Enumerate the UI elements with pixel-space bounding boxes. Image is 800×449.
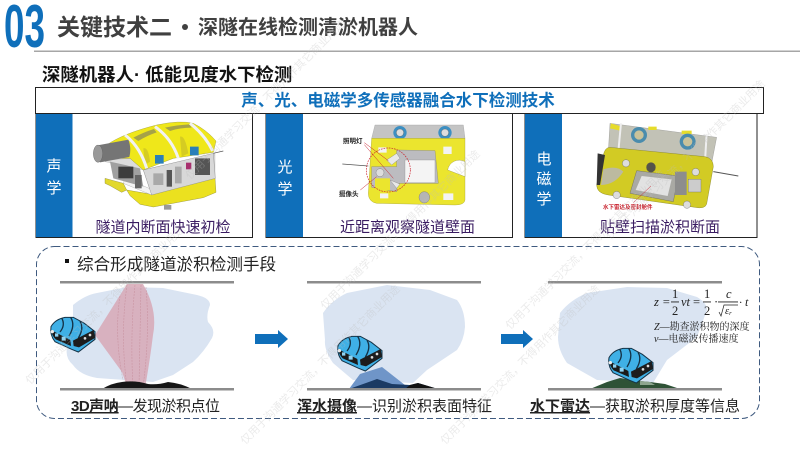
title [57, 14, 418, 40]
formula: · t [739, 295, 749, 309]
side label: optics [266, 114, 303, 237]
formula: 2 [672, 304, 678, 318]
scene: 3D sonar [51, 281, 234, 415]
title: 深隧在线检测清淤机器人 [198, 15, 418, 39]
subtitle: 深隧机器人· 低能见度水下检测 [42, 64, 292, 85]
image: yellow robot front view [93, 122, 223, 210]
text: 仅用于沟通学习交流，不得用作其它商业用途 [317, 147, 483, 312]
caption: 贴壁扫描淤积断面 [600, 219, 720, 236]
formula legend: v—电磁波传播速度 [654, 332, 738, 345]
icon: blue robot [609, 348, 653, 383]
banner: multi-sensor technology [36, 88, 764, 114]
label: radar and sealed parts: 水下雷达及密封舱件 [603, 203, 653, 211]
side label: acoustics: 学 [46, 180, 62, 197]
side label: acoustics [36, 114, 72, 237]
panel: acoustics [36, 114, 252, 238]
side label: electromagnetics [525, 114, 562, 237]
formula: · [714, 295, 718, 309]
side label: electromagnetics: 电 [536, 151, 552, 168]
formula legend [654, 320, 750, 345]
scene: underwater radar [530, 281, 750, 415]
formula legend: Z—勘查淤积物的深度 [654, 320, 750, 333]
image: yellow robot underside with radar [597, 123, 738, 208]
caption: 3D声呐—发现淤积点位 [71, 397, 220, 415]
text: 仅用于沟通学习交流，不得用作其它商业用途 [22, 222, 188, 387]
caption: 水下雷达—获取淤积厚度等信息 [530, 397, 740, 415]
formula: = [693, 295, 700, 309]
image: yellow robot underside with camera [342, 125, 465, 205]
caption: 近距离观察隧道壁面 [340, 218, 475, 236]
side label: electromagnetics: 学 [536, 191, 552, 208]
text: 仅用于沟通学习交流，不得用作其它商业用途 [437, 282, 603, 447]
formula: ε [725, 306, 729, 317]
text: 仅用于沟通学习交流，不得用作其它商业用途 [182, 17, 348, 182]
caption: 浑水摄像—识别淤积表面特征 [297, 397, 492, 415]
side label: optics: 光 [277, 159, 293, 176]
arrow [501, 330, 533, 348]
formula: z = [653, 295, 670, 309]
scene: turbid water camera [297, 281, 492, 415]
side label: optics: 学 [277, 181, 293, 198]
formula: r [729, 310, 732, 317]
label: camera: 摄像头 [339, 189, 359, 198]
heading: 综合形成隧道淤积检测手段 [77, 255, 276, 274]
formula: c [726, 287, 732, 301]
title: 关键技术二 [57, 14, 172, 40]
label: lamp: 照明灯 [343, 136, 363, 145]
side label: acoustics: 声 [46, 157, 62, 175]
icon: blue robot [51, 317, 95, 352]
formula: 1 [672, 287, 678, 301]
text: 仅用于沟通学习交流，不得用作其它商业用途 [602, 77, 768, 242]
formula: 2 [704, 304, 710, 318]
formula [653, 287, 749, 318]
icon: blue robot [338, 336, 382, 371]
panel: electromagnetics [525, 114, 757, 238]
arrow [255, 330, 288, 348]
banner: multi-sensor technology: 声、光、电磁学多传感器融合水下检测技术 [241, 90, 555, 110]
panel: optics [266, 114, 512, 238]
panel: combined detection methods [36, 246, 760, 418]
caption: 隧道内断面快速初检 [96, 219, 231, 236]
formula: 1 [704, 287, 710, 301]
text: 仅用于沟通学习交流，不得用作其它商业用途 [237, 282, 403, 447]
text: 仅用于沟通学习交流，不得用作其它商业用途 [502, 167, 668, 332]
formula: vt [681, 295, 691, 309]
side label: electromagnetics: 磁 [536, 171, 552, 188]
